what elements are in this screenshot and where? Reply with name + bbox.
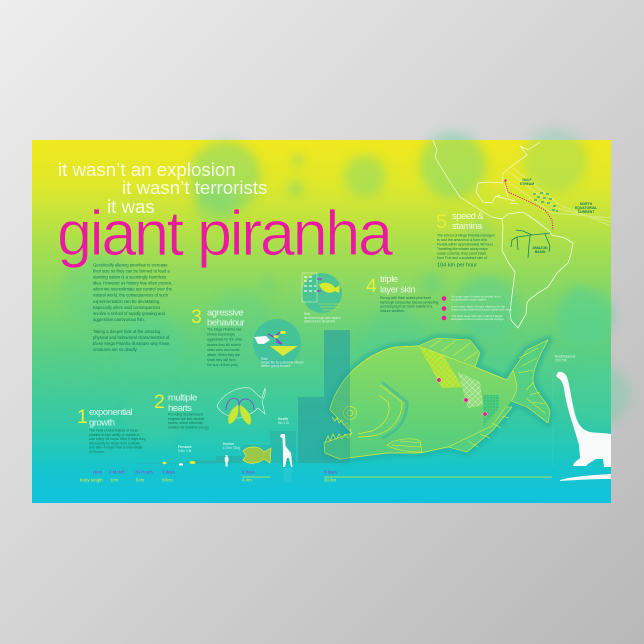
title main: giant piranha	[57, 199, 394, 269]
body: other sorts and would	[207, 348, 240, 352]
piranha route	[505, 181, 553, 230]
title line 1: it wasn’t an explosion	[58, 159, 236, 180]
heading: layer skin	[380, 284, 415, 296]
anal fin	[448, 407, 512, 452]
body: The Mega Piranha has	[207, 328, 242, 332]
key text 1: exceptionally tough scales.	[451, 298, 487, 302]
small piranha	[243, 447, 271, 463]
heading: stamina	[452, 221, 483, 232]
gill shadow	[382, 382, 407, 438]
label current: EQUATORIAL	[575, 206, 597, 210]
time row: 36 Hours	[135, 470, 154, 474]
giant piranha illustration	[324, 338, 550, 459]
length row: 1cm	[110, 478, 119, 482]
number 5: 5	[436, 211, 447, 233]
intro text: Taking a deeper look at the amazing	[93, 329, 161, 334]
heading: exponential	[89, 407, 132, 418]
length row: 30.8m	[324, 478, 337, 482]
bars: size comparison	[192, 330, 350, 463]
caption: Single file by a piranha stream	[261, 360, 304, 364]
heart diagram	[217, 388, 265, 425]
length row: 5cm	[136, 478, 145, 482]
number 3: 3	[191, 306, 202, 328]
intro text: idea. However as history has often proven,	[93, 281, 172, 286]
label pressure: 0.5m 1.5t	[178, 449, 191, 453]
body: the size of their prey.	[207, 363, 238, 367]
body: enables its massive energy	[168, 425, 209, 429]
section 5: speed & stamina	[436, 211, 495, 268]
speed figure: 104 km per hour	[437, 262, 477, 268]
heading: multiple	[168, 392, 197, 404]
body: Providing its prehistoric	[168, 412, 203, 416]
body: and after 4 larger than a blue whale	[89, 446, 142, 450]
tail fin	[507, 340, 550, 423]
intro text: aggressive carnivorous fish.	[93, 317, 145, 322]
body outline	[324, 346, 507, 459]
teeth	[325, 417, 352, 443]
length row: body length	[80, 478, 103, 482]
heading: triple	[380, 274, 398, 285]
length row: 4.4m	[242, 478, 252, 482]
body: mature skeleton.	[380, 309, 405, 313]
marker line	[552, 372, 554, 466]
intro text: experimentation can be devastating.	[93, 299, 160, 304]
skin layer key	[442, 294, 513, 321]
skin layer outer	[420, 348, 463, 388]
body: and keeping from harm bullets of a	[380, 305, 432, 309]
pacu silhouette	[162, 462, 166, 464]
length row: 50cm	[162, 478, 173, 482]
label gulf stream: GULF	[522, 178, 532, 182]
intro text: physical and behavioral characteristics of	[93, 335, 170, 340]
fish outline	[217, 388, 265, 418]
intro text: when we overestimate our control over the	[93, 287, 173, 292]
attack diagram	[253, 319, 304, 368]
fish halo	[324, 338, 550, 459]
giraffe reflection	[283, 468, 292, 482]
timeline axis	[137, 462, 216, 464]
label giraffe: Giraffe	[278, 417, 289, 421]
white prey	[254, 336, 270, 344]
body: Strong with thick scales plus three	[380, 296, 431, 300]
body: Travelling like whales along major	[437, 247, 489, 251]
body: from Fl at and a sustained rate of	[437, 256, 487, 260]
key dot 3	[442, 316, 446, 320]
caption: Its three tough skin layers	[304, 316, 341, 320]
purple fish	[268, 332, 282, 344]
time row: 1 Month	[109, 470, 125, 474]
intro text: involve a school of rapidly growing and	[93, 311, 166, 316]
white fish	[179, 463, 183, 466]
yellow fish small	[274, 335, 278, 338]
intro text: these Mega Piranha illustrates why these	[93, 341, 170, 346]
label human: 1.75m 75kg	[223, 446, 240, 450]
body: in 9 hours.	[89, 450, 105, 454]
body: will exactly be larger than a whale,	[89, 441, 141, 445]
body: attack. When they are	[207, 353, 240, 357]
label human: Human	[223, 442, 234, 446]
yellow fish	[280, 331, 286, 334]
skin marker 1	[437, 378, 441, 382]
body: hearts, which efficiently	[168, 421, 203, 425]
time row: 3 days	[162, 470, 176, 474]
stripes	[318, 304, 341, 310]
body: to cold the amazon in a form of to	[437, 238, 487, 242]
north america coast	[433, 140, 540, 219]
body: flat tough connective tissues protecting	[380, 300, 439, 304]
title line 2: it wasn’t terrorists	[122, 177, 267, 198]
section 2: multiple hearts	[154, 391, 209, 429]
heading: agressive	[207, 308, 243, 318]
intro text: starving nation is a seemingly harmless	[93, 274, 166, 280]
gill	[358, 385, 402, 437]
skin layer inner	[483, 395, 499, 427]
background blobs	[48, 128, 630, 445]
key dot 1	[442, 296, 446, 301]
body: piranha is their ability to double in	[89, 433, 139, 437]
heading: hearts	[168, 403, 192, 414]
intro text: their size so they can be farmed to feed a	[93, 268, 170, 274]
number 1: 1	[77, 406, 88, 428]
caption: Skin	[304, 312, 310, 316]
circle	[302, 273, 342, 313]
horizon band	[32, 463, 611, 503]
body: The most crucial feature of these	[89, 428, 138, 432]
time row: Next	[93, 470, 103, 474]
yellow fish	[319, 283, 340, 293]
start marker	[504, 179, 507, 182]
body: ocean currents, they could travel	[437, 252, 486, 256]
map	[433, 140, 611, 328]
label pressure: Pressure	[178, 445, 192, 449]
current bands	[503, 168, 611, 226]
shoal diagram	[302, 273, 342, 324]
intro text: Especially when said consequences	[93, 305, 160, 310]
key text 1: An outer layer formed by protein from	[451, 294, 501, 298]
intro text: creatures are so deadly.	[93, 347, 138, 352]
key text 2: tissue underneath and avoid bullets and teeth.	[451, 308, 513, 312]
label basin: AMAZON	[533, 246, 548, 250]
hearts	[228, 405, 251, 425]
heading: growth	[89, 418, 115, 428]
body: The school of Mega Piranha managed	[437, 234, 495, 238]
length bars	[242, 476, 552, 478]
south america coast	[502, 212, 573, 328]
skin layer middle	[458, 372, 483, 408]
poster panel	[32, 140, 611, 503]
giraffe	[280, 434, 292, 467]
skin marker 3	[483, 412, 487, 416]
dinosaur	[556, 372, 611, 467]
circle	[253, 319, 301, 367]
label gulf stream: STREAM	[520, 182, 534, 186]
body: Florida within approximately 48 hours.	[437, 242, 494, 246]
dorsal fin	[418, 338, 480, 367]
caption: Raid	[261, 357, 268, 361]
label dinosaur: 27m 50t	[555, 358, 567, 362]
tall bar overlay on fish head	[324, 374, 350, 459]
eye	[344, 406, 356, 420]
net grid	[302, 273, 317, 302]
time row: 9 days	[324, 470, 338, 474]
shoal marks	[533, 193, 558, 211]
rivers	[511, 230, 550, 258]
label giraffe: 5m 1.5t	[278, 421, 289, 425]
section 1: exponential growth	[77, 406, 146, 454]
timeline labels	[80, 470, 552, 482]
caption: before going forward.	[261, 364, 291, 368]
grid cells	[304, 277, 316, 291]
human figure	[225, 455, 228, 466]
body	[324, 346, 517, 459]
key text 3: adaptations from environmental change.	[451, 317, 505, 321]
time row: 6 days	[242, 470, 256, 474]
intro text: Genetically altering piranhas to increase	[93, 262, 168, 268]
label basin: BASIN	[535, 250, 546, 254]
label current: CURRENT	[578, 210, 595, 214]
scale comparison figures	[137, 354, 576, 482]
heading: behaviour	[207, 318, 245, 328]
yellow fish	[190, 461, 196, 464]
body: aggressive for the other	[207, 338, 243, 342]
body: small they will form	[207, 358, 236, 362]
intro text: natural world, the consequences of such	[93, 293, 169, 298]
heading: speed &	[452, 211, 485, 222]
skin marker 2	[464, 398, 468, 402]
pectoral fin	[387, 439, 422, 452]
key dot 2	[442, 306, 446, 311]
purple fish	[317, 279, 322, 291]
body: engines are twin distinct	[168, 417, 204, 421]
key text 2: A thin inner layer of more elasticity to the	[451, 304, 505, 308]
yellow wedge	[270, 346, 298, 356]
body: shown surprisingly	[207, 333, 235, 337]
number 4: 4	[366, 275, 377, 297]
title line 3: it was	[107, 196, 155, 217]
ground patch	[560, 474, 611, 481]
title	[57, 159, 394, 269]
section 4: triple layer skin	[366, 274, 439, 313]
label dinosaur: Brachiosaurus	[555, 354, 576, 358]
vessels	[226, 398, 254, 410]
body: size every 48 hours. After 9 days they	[89, 437, 146, 441]
key text 3: The thick layer with skin cells for larger	[451, 314, 503, 318]
number 2: 2	[154, 391, 165, 413]
label current: NORTH	[580, 202, 593, 206]
section 3: aggressive behaviour	[191, 306, 245, 367]
caption: defend from small fish	[304, 320, 335, 324]
body: whales they kill smash	[207, 343, 241, 347]
